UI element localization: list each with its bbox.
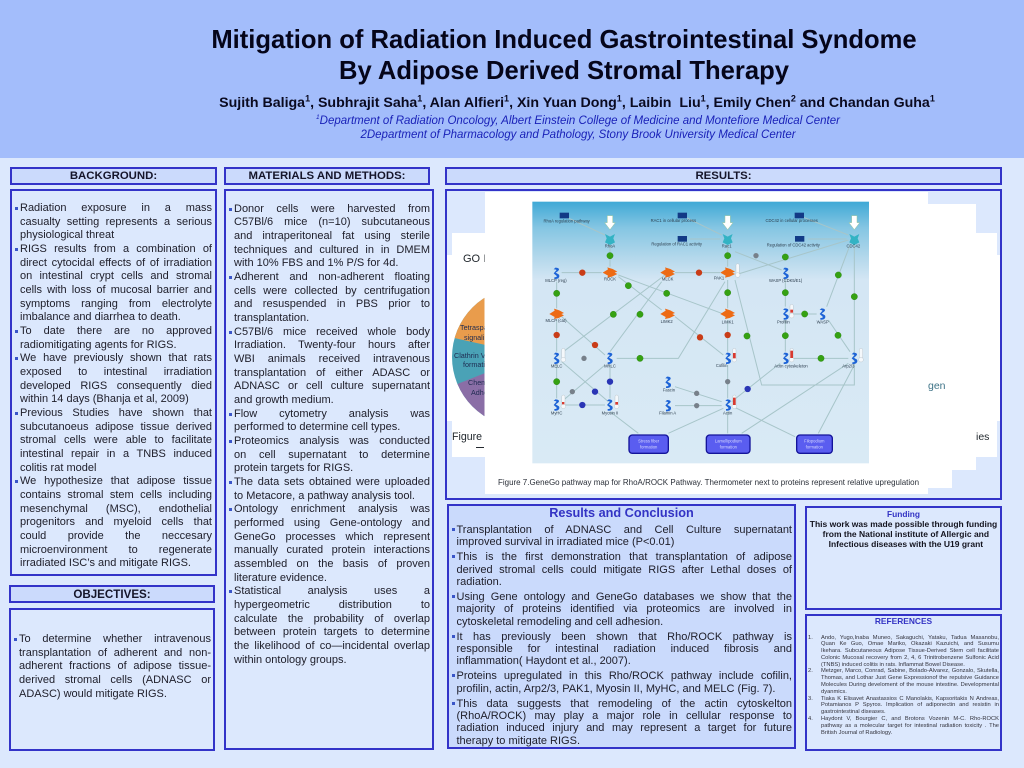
methods text: and intraperitoneal fat using sterile	[234, 230, 430, 242]
pie labels: Adhe	[471, 388, 488, 397]
background text: stromal cells were able to facilitate	[20, 434, 212, 446]
background text: casualty setting represents a serious	[20, 216, 212, 228]
methods text: cells were collected by centrifugation	[234, 285, 430, 297]
affiliations: 1Department of Radiation Oncology, Albert Einstein College of Medicine and Montefiore Medical Center	[316, 114, 840, 127]
references list: British Journal of Radiology.	[821, 730, 892, 736]
results and conclusion text: profilin, actin, Arp2/3, PAK1, Myosin II, MyHC, and MELC (Fig. 7).	[456, 683, 775, 695]
references list: Molecules During develoment of the mouse intestine. Developmental	[821, 682, 999, 688]
pathway labels: CDC42	[847, 244, 861, 249]
pathway labels: Stress fiber	[638, 438, 660, 443]
figure 7 caption: Figure 7.GeneGo pathway map for RhoA/ROCK Pathway. Thermometer next to proteins represent relative upregulation	[498, 477, 919, 487]
figure fragments right text: gen	[928, 380, 946, 392]
background text	[15, 202, 212, 569]
references heading: REFERENCES	[875, 616, 932, 626]
references list: Ikehara. Subcutaneous Adipose Tissue-Derived Stem cell facilitate	[821, 648, 999, 654]
results and conclusion text	[452, 524, 792, 747]
results and conclusion text: Using Gene ontology and GeneGo databases we show that the	[456, 591, 792, 603]
pathway labels: Cofilin	[716, 363, 728, 368]
pathway labels: Filamin A	[659, 411, 676, 416]
pie labels: Clathrin V	[454, 351, 486, 360]
funding text: This work was made possible through funding	[810, 519, 997, 529]
pathway labels: Filopodium	[804, 438, 825, 443]
title: By Adipose Derived Stromal Therapy	[339, 57, 789, 85]
title	[211, 26, 917, 85]
objectives text: transplantation of adherent and non-	[19, 647, 211, 659]
background text: cells with loss of mucosal barrier and	[20, 284, 212, 296]
pathway labels: Lamellipodium	[715, 438, 742, 443]
background text: within 14 days (Bhanja et al, 2009)	[20, 393, 189, 405]
pathway green interaction nodes	[553, 252, 857, 385]
references list	[808, 634, 999, 736]
references list: Metzger, Marco, Conrad, Sabine, Bolado-Alvarez, Gonzalo, Skutella,	[821, 668, 999, 674]
objectives text: derived stromal cells (ADNASC or	[19, 674, 211, 686]
results and conclusion text: This data suggests that remodeling of the actin cytoskelton	[456, 698, 792, 710]
pathway labels: Profilin	[777, 319, 790, 324]
pathway labels: LIMK1	[722, 319, 734, 324]
methods text: performed using Gene-ontology and	[234, 517, 430, 529]
white figure background	[447, 192, 1000, 494]
methods text: on cell supernatant to determine	[234, 449, 430, 461]
heading: results: RESULTS:	[695, 170, 752, 182]
pathway labels: Actin cytoskeleton	[774, 364, 808, 369]
pathway labels: WASP	[817, 319, 829, 324]
methods text: between protein targets to determine	[234, 626, 430, 638]
background text: Radiation exposure in a mass	[20, 202, 212, 214]
pathway labels: LIMK2	[661, 319, 673, 324]
background text: irradiated ISC’s and mitigate RIGS.	[20, 557, 191, 569]
pathway labels: MELC	[551, 363, 562, 368]
methods text: literature evidence.	[234, 572, 327, 584]
background text: We hypothesize that adipose tissue	[20, 475, 212, 487]
background text: RIGS results from a combination of	[20, 243, 212, 255]
affiliations: 2Department of Pharmacology and Pathology, Stony Brook University Medical Center	[360, 129, 796, 141]
results and conclusion text: derived stromal cells could mitigate RIGS after Lethal doses of	[456, 564, 792, 576]
results and conclusion text: inflammation( Haydont et al., 2007).	[456, 655, 631, 667]
methods text: C57Bl/6 mice (n=10) subcutaneous	[234, 216, 430, 228]
references list: Potamianos P Spyros. Implication of adiponectin and resistin in	[821, 702, 999, 708]
funding text: from the National institute of Allergic and	[823, 529, 989, 539]
methods text: and growth medium.	[234, 394, 334, 406]
methods text: WBI animals received intravenous	[234, 353, 430, 365]
pathway labels: CDC42 in cellular processes	[765, 218, 818, 223]
methods text: techniques and cultured in in DMEM	[234, 244, 430, 256]
outcome boxes	[629, 435, 832, 453]
results and conclusion text: Proteins upregulated in this Rho/ROCK pathway include cofilin,	[456, 670, 792, 682]
background text: exposed to intestinal irradiation	[20, 366, 212, 378]
background text: Previous Studies have shown that	[20, 407, 212, 419]
methods text: performed to determine cell types.	[234, 421, 400, 433]
pathway labels: ROCK	[604, 277, 616, 282]
panel: objectives	[9, 608, 215, 751]
pathway labels: formation	[806, 444, 824, 449]
funding text: Infectious diseases with the U19 grant	[829, 539, 983, 549]
pathway labels: Regulation of CDC42 activity	[767, 242, 821, 247]
references list: Thomas, and Lothar Just Gene Expressionof the repulsive Guidance	[821, 675, 999, 681]
authors: Sujith Baliga1, Subhrajit Saha1, Alan Alfieri1, Xin Yuan Dong1, Laibin Liu1, Emily Chen2 and Chandan Guha1	[219, 93, 935, 111]
figure fragments text: Figure	[452, 431, 482, 443]
methods text: Statistical analysis uses a	[234, 585, 430, 597]
results and conclusion heading: Results and Conclusion	[549, 506, 694, 520]
figure: results images	[447, 192, 1000, 494]
header band	[0, 0, 1024, 158]
background text: We have previously shown that rats	[20, 352, 212, 364]
methods text: hypergeometric distribution to	[234, 599, 430, 611]
results and conclusion text: This is the first demonstration that transplantation of adipose	[456, 551, 792, 563]
pathway labels: Fascin	[663, 387, 676, 392]
thermometers	[561, 264, 863, 409]
results and conclusion text: radiation induced injury and may represent a target for future	[456, 722, 792, 734]
heading: objectives: OBJECTIVES:	[73, 588, 151, 601]
methods text: to Metacore, a pathway analysis tool.	[234, 490, 415, 502]
results and conclusion text: improved survival in irradiated mice (P<0.01)	[456, 536, 674, 548]
background text: contains stromal stem cells including	[20, 489, 212, 501]
references list: pathway as a molecular target for intestinal radiation toxicity . The	[821, 723, 999, 729]
pathway red interaction nodes	[553, 269, 731, 348]
methods text: Donor cells were harvested from	[234, 202, 430, 214]
heading: background	[10, 167, 217, 185]
pie chart fragment	[452, 298, 484, 416]
background text: colitis rat model	[20, 462, 96, 474]
pathway labels: WASP (CDK5/E1)	[769, 278, 803, 283]
background text: physiological threat	[20, 229, 114, 241]
funding text	[810, 519, 997, 549]
heading: materials and methods: MATERIALS AND METHODS:	[249, 170, 405, 182]
pathway edges	[557, 216, 854, 437]
methods text: GeneGo processes which represent	[234, 531, 430, 543]
pie labels: signali	[464, 333, 485, 342]
funding heading: Funding	[887, 509, 920, 519]
panel: results	[445, 189, 1002, 500]
background text: To date there are no approved	[20, 325, 212, 337]
panel: funding	[805, 506, 1002, 610]
pie labels: Tetraspa	[460, 323, 488, 332]
results and conclusion text: Transplantation of ADNASC and Cell Culture supernatant	[456, 524, 792, 536]
results and conclusion text: therapy to mitigate RIGS.	[456, 735, 580, 747]
results and conclusion text: majority of proteins identified via proteomics are involved in	[456, 603, 792, 615]
references list: Colonic Mucosal recovery from 2, 4, 6 Trinitrobenzene Sulfonic Acid	[821, 655, 999, 661]
results and conclusion text: It has previously been shown that Rho/ROCK pathway is	[456, 631, 792, 643]
background text: progenitors and myeloid cells that	[20, 516, 212, 528]
background text: on intestinal crypt cells and stromal	[20, 270, 212, 282]
methods text: with 10% FBS and 1% P/S for 4d.	[234, 257, 398, 269]
affiliations	[316, 114, 840, 141]
background text: intestinal repair in a TNBS induced	[20, 448, 212, 460]
pathway labels: formation	[640, 444, 658, 449]
references list: Tiaka K Elisavet Anastassios C Manolakis, Kapsoritakis N Andreas,	[821, 696, 999, 702]
panel: references: 1.	[808, 634, 813, 640]
objectives text: adherent fractions of adipose tissue-	[19, 660, 211, 672]
methods text: Ontology enrichment analysis was	[234, 503, 430, 515]
pie labels	[454, 325, 484, 395]
background text: developed RIGS consequently died	[20, 380, 212, 392]
title: Mitigation of Radiation Induced Gastrointestinal Syndome	[211, 26, 917, 54]
pathway labels: MRLC	[604, 363, 616, 368]
results and conclusion text: (RhoA/ROCK) may play a major role in cellular response to	[456, 710, 792, 722]
panel: materials and methods	[224, 189, 434, 750]
methods text: calculate the probability of overlap	[234, 613, 430, 625]
pie labels: formati	[463, 360, 485, 369]
pathway labels: RhoA regulation pathway	[544, 218, 591, 223]
figure fragments right text: ies	[976, 431, 989, 443]
figure fragments text: GO E	[463, 253, 491, 265]
panel: references: 2.	[808, 668, 813, 674]
methods text: The data sets obtained were uploaded	[234, 476, 430, 488]
heading: results	[445, 167, 1002, 185]
pathway map	[532, 202, 869, 463]
panel: background	[10, 189, 217, 576]
references list: gastrointestinal diseases.	[821, 709, 886, 715]
results and conclusion text: responsible for intestinal radiation induced fibrosis and	[456, 643, 792, 655]
methods text	[229, 202, 430, 666]
methods text: protein targets for RIGS.	[234, 462, 353, 474]
background text: could provide the neccesary	[20, 530, 212, 542]
pathway labels: Regulation of RAC1 activity	[651, 242, 703, 247]
pathway labels: Rac1	[722, 244, 732, 249]
methods text: ADNASC or cell culture supernatant	[234, 380, 430, 392]
heading: background: BACKGROUND:	[70, 170, 157, 182]
methods text: Irradiation. Twenty-four hours after	[234, 339, 430, 351]
background text: symptoms ranging from electrolyte	[20, 298, 212, 310]
methods text: and resuspended in PBS prior to	[234, 298, 430, 310]
background text: imbalance and diarrhea to death.	[20, 311, 181, 323]
methods text: manually curated protein interactions	[234, 544, 430, 556]
pathway labels: Myosin II	[602, 411, 618, 416]
heading: objectives	[9, 585, 215, 603]
pathway protein nodes	[549, 213, 860, 411]
objectives text: ADASC) would mitigate RIGS.	[19, 688, 167, 700]
results and conclusion text: radiation.	[456, 576, 502, 588]
pathway labels: MLCP (cat)	[546, 318, 567, 323]
methods text: assembled on the basis of proven	[234, 558, 430, 570]
pathway labels: Actin	[723, 411, 733, 416]
methods text: within ontology groups.	[234, 654, 347, 666]
pathway gray and blue interaction nodes	[570, 253, 759, 408]
methods text: Adherent and non-adherent floating	[234, 271, 430, 283]
heading: materials and methods	[224, 167, 430, 185]
references list: Quan Ke Guo, Omae Mariko, Okazaki Kazuichi, and Susumu	[821, 641, 999, 647]
panel: references: 3.	[808, 696, 813, 702]
pie labels: Chem	[468, 378, 487, 387]
background text: radiomitigating agents for RIGS.	[20, 339, 177, 351]
pathway labels: formation	[720, 444, 738, 449]
pathway labels	[544, 218, 861, 449]
methods text: Proteomics analysis was conducted	[234, 435, 430, 447]
background text: subcutanoeus adipose tissue derived	[20, 421, 212, 433]
pathway labels: RAC1 in cellular process	[651, 218, 696, 223]
methods text: Flow cytometry analysis was	[234, 408, 430, 420]
methods text: C57Bl/6 mice received whole body	[234, 326, 430, 338]
objectives text	[14, 633, 211, 700]
references list: Haydont V, Bourgier C, and Brotons Vozenin M-C. Rho-ROCK	[821, 716, 999, 722]
pathway labels: PAK1	[714, 275, 725, 280]
panel: references	[805, 614, 1002, 751]
results and conclusion text: cytoskeletal remodeling and cell adhesion.	[456, 616, 663, 628]
pathway labels: RhoA	[605, 244, 615, 249]
methods text: transplantation of either ADASC or	[234, 367, 430, 379]
pathway labels: MyHC	[551, 411, 562, 416]
pathway labels: MLCK	[662, 277, 674, 282]
background text: mesenchymal (MSC), endothelial	[20, 503, 212, 515]
pathway labels: Arp2/3	[842, 363, 855, 368]
references list: (TNBS) induced colitis in rats. Inflammat Bowel Disease.	[821, 662, 965, 668]
figure fragments right text	[928, 380, 989, 443]
objectives text: To determine whether intravenous	[19, 633, 211, 645]
methods text: transplantation.	[234, 312, 309, 324]
references list: dyanmics.	[821, 689, 847, 695]
background text: microenvironment to regenerate	[20, 544, 212, 556]
panel: results and conclusion	[447, 504, 796, 749]
background text: direct cytocidal effects of of irradiation	[20, 257, 212, 269]
methods text: the likelihood of co—incidental overlap	[234, 640, 430, 652]
figure fragments text	[452, 254, 484, 448]
panel: references: 4.	[808, 716, 813, 722]
references list: Ando, Yugo,Inaba Muneo, Sakaguchi, Yataku, Tadua Masanobu,	[821, 634, 999, 640]
pathway labels: MLCP (reg)	[545, 278, 567, 283]
